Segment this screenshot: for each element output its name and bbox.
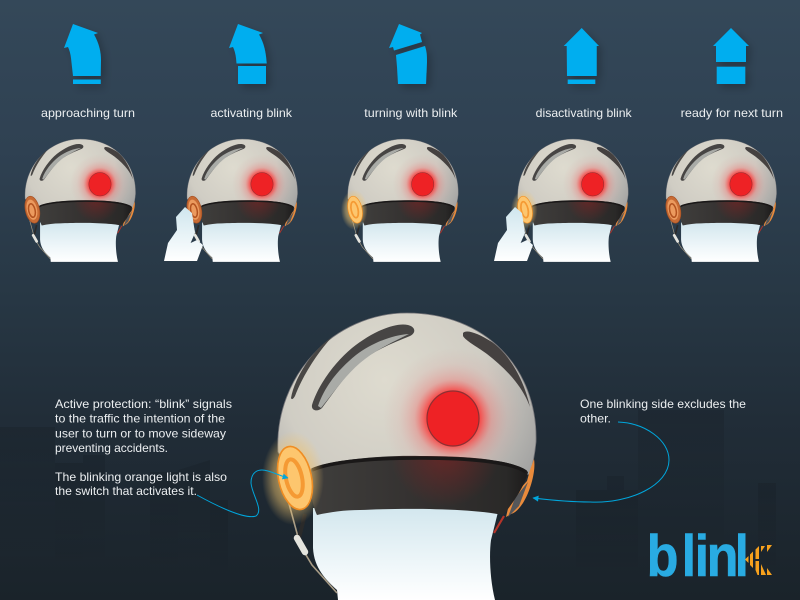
text block: active protection: The blinking orange light is also <box>55 470 227 484</box>
text block: one blinking side: One blinking side excludes the <box>580 397 746 411</box>
helmet, side light off <box>664 139 777 262</box>
step 1: approaching turn <box>23 24 136 262</box>
step 3: turning with blink <box>341 24 458 262</box>
text block: active protection: to the traffic the intention of the <box>55 412 225 426</box>
helmet with hand and glowing light <box>494 139 628 262</box>
step 4: disactivating blink <box>494 28 633 262</box>
arrow icon: split while turning <box>389 24 427 84</box>
text block: active protection: preventing accidents. <box>55 441 168 455</box>
callout arrow: to orange switch <box>197 470 288 517</box>
large helmet with active blink <box>262 313 536 600</box>
arrow icon: straight, past the line <box>713 28 749 84</box>
arrow icon: straight, before the line <box>564 28 599 84</box>
text block: one blinking side: other. <box>580 412 611 426</box>
text block: one blinking side <box>580 397 746 426</box>
logo: blink: blink <box>647 523 764 589</box>
logo: blink <box>650 533 772 577</box>
text block: active protection: Active protection: “blink” signals <box>55 397 232 411</box>
arrow icon: curving, on the line <box>229 24 267 84</box>
label: approaching turn <box>41 106 135 120</box>
logo: orange chevron stripes <box>745 545 772 575</box>
callout arrow: to opposite light <box>533 422 669 502</box>
label: disactivating blink <box>536 106 633 120</box>
helmet, side light off <box>23 139 136 262</box>
text block: active protection: user to turn or to move sideway <box>55 426 226 440</box>
step 5: ready for next turn <box>664 28 783 262</box>
label: ready for next turn <box>681 106 783 120</box>
text block: active protection: the switch that activates it. <box>55 484 197 498</box>
text block: active protection <box>55 397 232 498</box>
label: activating blink <box>210 106 293 120</box>
label: turning with blink <box>364 106 458 120</box>
arrow icon: curving, before the line <box>64 24 101 84</box>
helmet with hand pressing the switch <box>164 139 298 262</box>
city skyline background <box>0 410 776 600</box>
helmet, side light glowing <box>341 139 458 262</box>
step 2: activating blink <box>164 24 298 262</box>
